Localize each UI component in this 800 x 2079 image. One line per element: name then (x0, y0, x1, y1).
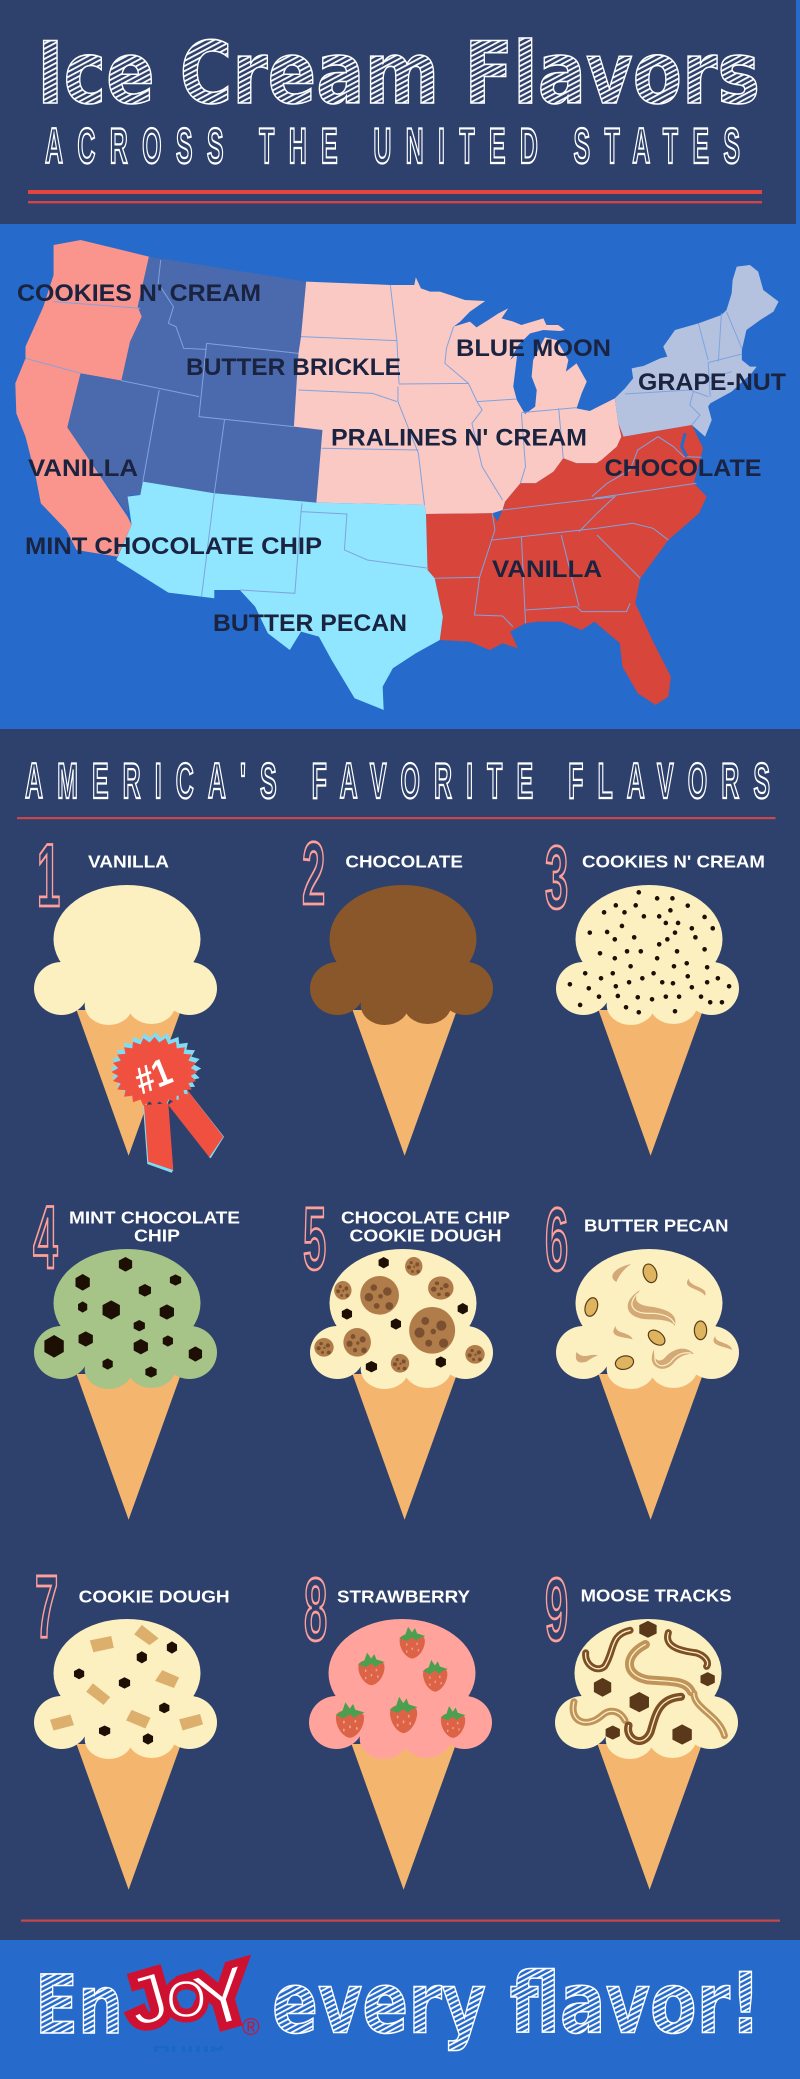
panel: footer (0, 1940, 800, 2079)
flavor 6 number: 6 (545, 1189, 568, 1289)
subtitle: ACROSS THE UNITED STATES (45, 119, 740, 174)
cone: mint chocolate chip (34, 1249, 217, 1520)
cone: moose tracks (555, 1619, 738, 1890)
map label: vanilla south: VANILLA (492, 556, 602, 583)
map label: butter pecan: BUTTER PECAN (213, 610, 407, 637)
logo: JOY: Y (185, 1951, 263, 2053)
logo: JOY: J (114, 1958, 184, 2050)
cone: vanilla (34, 885, 217, 1156)
footer text: En: En (35, 1959, 123, 2053)
cone: chocolate chip cookie dough (310, 1249, 493, 1520)
cone: butter pecan (556, 1249, 739, 1520)
flavor 5 label: CHOCOLATE CHIP (341, 1208, 510, 1228)
cookie crumbs (570, 892, 729, 1012)
region: mountain (67, 257, 322, 513)
region: southeast (426, 423, 707, 705)
strawberries (335, 1627, 466, 1738)
chocolate chips (44, 1257, 202, 1378)
map of the United States by region (15, 240, 779, 710)
logo: JOY: Y (185, 1951, 263, 2053)
region: southwest (116, 482, 443, 710)
state borders (26, 260, 742, 627)
flavor 8 label: STRAWBERRY (337, 1586, 470, 1606)
panel: header (0, 0, 800, 224)
flavor 4 label: CHIP (134, 1226, 180, 1246)
flavor 9 label: MOOSE TRACKS (581, 1586, 732, 1606)
flavor 3 label: COOKIES N' CREAM (582, 852, 765, 872)
flavor 8 number: 8 (304, 1559, 327, 1659)
flavor 2 label: CHOCOLATE (345, 852, 463, 872)
logo: JOY: O (166, 1971, 206, 2029)
flavor 3 number: 3 (545, 827, 568, 927)
header double rule (28, 190, 762, 203)
map label: pralines n' cream: PRALINES N' CREAM (331, 424, 587, 452)
dough chunks and chips (50, 1625, 203, 1745)
map label: mint chocolate chip: MINT CHOCOLATE CHIP (25, 533, 322, 560)
flavor 9 number: 9 (545, 1559, 568, 1659)
ribbon text: #1 (129, 1050, 178, 1103)
map label: vanilla west: VANILLA (28, 455, 138, 482)
flavor 4 label: MINT CHOCOLATE (69, 1208, 240, 1228)
flavor 7 number: 7 (35, 1557, 58, 1657)
flavor 4 label (69, 1208, 240, 1246)
flavor 5 number: 5 (303, 1188, 326, 1288)
section rule (17, 817, 776, 819)
pecans and swirls (576, 1263, 732, 1371)
cookies and chips (314, 1257, 485, 1373)
icon: number one ribbon (110, 1032, 224, 1173)
Chesapeake Bay (682, 433, 687, 457)
logo: JOY: J (114, 1958, 184, 2050)
panel: map (0, 224, 800, 729)
flavor 1 number: 1 (37, 825, 60, 925)
logo: JOY: Home (152, 2029, 224, 2065)
fudge swirls and peanut butter cups (573, 1621, 724, 1745)
cone: cookies n' cream (556, 885, 739, 1156)
logo: JOY: O (166, 1971, 206, 2029)
region: midwest (294, 277, 621, 514)
logo: JOY (124, 1954, 260, 2052)
flavor 6 label: BUTTER PECAN (584, 1216, 728, 1236)
cone: chocolate (310, 885, 493, 1156)
map label: grape-nut: GRAPE-NUT (638, 369, 786, 396)
map label: butter brickle: BUTTER BRICKLE (186, 354, 401, 381)
flavor 7 label: COOKIE DOUGH (79, 1586, 230, 1606)
flavor 2 number: 2 (302, 823, 325, 923)
heading: America's favorite flavors: AMERICA'S FAVORITE FLAVORS (25, 754, 770, 809)
flavor 5 label (341, 1208, 510, 1246)
flavor 5 label: COOKIE DOUGH (350, 1226, 502, 1246)
region: west coast (15, 240, 149, 557)
footer rule (21, 1920, 780, 1922)
cone: strawberry (309, 1619, 492, 1890)
logo: registered mark: ® (242, 2014, 260, 2041)
flavor 1 label: VANILLA (88, 852, 169, 872)
region: northeast (615, 265, 779, 437)
cone: cookie dough (34, 1619, 217, 1890)
map label: cookies n' cream: COOKIES N' CREAM (17, 280, 261, 307)
map label: chocolate: CHOCOLATE (604, 455, 762, 482)
map label: blue moon: BLUE MOON (456, 335, 611, 362)
flavor 4 number: 4 (33, 1187, 58, 1287)
logo: heart (177, 1991, 196, 2009)
